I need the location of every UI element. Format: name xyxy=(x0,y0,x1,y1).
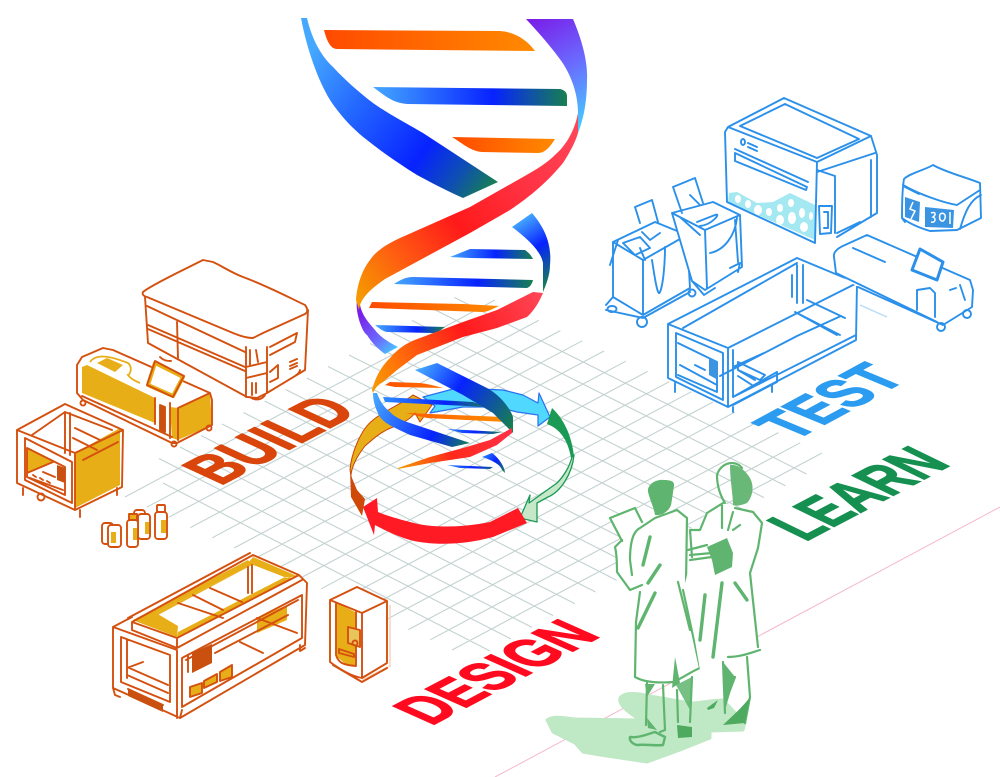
rung: blue 5 xyxy=(394,277,533,288)
arrow: build orange tail xyxy=(350,470,365,516)
arrow: build yellow xyxy=(350,395,432,475)
panel: scientists xyxy=(547,463,762,762)
rung: blue 2 xyxy=(373,87,567,106)
rung: blue 7 xyxy=(375,325,445,333)
icon: long test device xyxy=(833,235,973,331)
icon: reagent bottles xyxy=(102,505,167,547)
strand: blue second xyxy=(512,213,550,292)
strand: small blue end xyxy=(482,453,505,473)
strand: blue top xyxy=(301,18,498,198)
rung: orange 8 xyxy=(385,382,443,388)
floor grid xyxy=(125,298,822,651)
figure: male scientist xyxy=(610,480,700,745)
arrow: learn light green xyxy=(520,455,574,522)
strand: red third xyxy=(398,428,512,469)
strand: purple lower xyxy=(357,300,398,354)
rung: blue 4 xyxy=(450,249,533,259)
panel: build equipment xyxy=(17,260,308,547)
heading: LEARN: LEARN xyxy=(752,439,965,548)
pink ground line xyxy=(495,507,1000,777)
icon: long design instrument xyxy=(113,553,307,718)
rung: blue 11 xyxy=(447,429,502,434)
icon: large test instrument xyxy=(725,98,877,243)
heading: BUILD: BUILD xyxy=(167,388,373,492)
arrow: learn green xyxy=(547,408,574,465)
icon: yellow build instrument xyxy=(77,348,212,446)
strand: blue third lower xyxy=(373,393,470,447)
rung: orange 1 xyxy=(324,30,535,51)
arrow: design red xyxy=(363,498,527,544)
rung: blue 12 xyxy=(447,465,493,469)
strand: purple top xyxy=(526,19,587,133)
strand: red main xyxy=(356,113,578,310)
icon: large build instrument xyxy=(143,260,308,399)
floor shadow xyxy=(547,693,745,762)
panel: design build test learn cycle arrows xyxy=(350,388,574,544)
heading: DESIGN: DESIGN xyxy=(378,612,615,732)
rung: orange 10 xyxy=(406,413,506,422)
strand: red second xyxy=(372,292,543,393)
heading: TEST: TEST xyxy=(737,355,922,447)
icon: right cart xyxy=(672,178,742,295)
icon: open frame build instrument xyxy=(17,404,123,517)
icon: left cart xyxy=(606,200,696,327)
panel: design equipment xyxy=(113,553,390,718)
figure: female scientist xyxy=(685,463,762,725)
icon: open frame test instrument xyxy=(668,258,857,412)
icon: small design cabinet xyxy=(330,587,390,682)
icon: compact test device xyxy=(902,165,981,231)
rung: orange 6 xyxy=(369,302,499,312)
rung: orange 3 xyxy=(452,137,555,153)
panel: test equipment xyxy=(606,98,981,412)
rung: blue 9 xyxy=(383,397,487,407)
arrow: test cyan xyxy=(423,388,550,426)
panel: dna double helix xyxy=(301,18,587,473)
strand: blue third upper xyxy=(415,363,513,433)
